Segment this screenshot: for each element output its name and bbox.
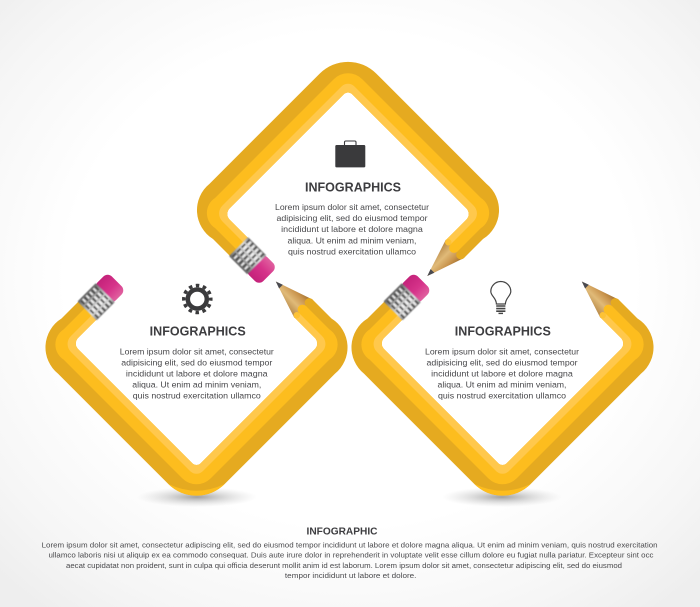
shadow: left pencil: [137, 487, 257, 507]
text block: left panel: [120, 346, 274, 401]
text block: footer: aecat cupidatat non proident, sunt in culpa qui officia deserunt mollit anim id est laborum. Lorem ipsum dolor sit amet, consectetur adipiscing elit, sed do eiusmod: [66, 561, 622, 570]
text block: left panel: quis nostrud exercitation ullamco: [133, 391, 261, 401]
heading: left panel: INFOGRAPHICS: [150, 325, 246, 339]
text block: left panel: Lorem ipsum dolor sit amet, consectetur: [120, 346, 274, 356]
icon: gear: [184, 286, 211, 312]
text block: top panel: Lorem ipsum dolor sit amet, consectetur: [275, 202, 429, 212]
text block: left panel: incididunt ut labore et dolore magna: [126, 368, 268, 378]
text block: footer: Lorem ipsum dolor sit amet, consectetur adipiscing elit, sed do eiusmod tempor incididunt ut labore et dolore magna aliqua. Ut enim ad minim veniam, quis nostrud exercitation: [42, 540, 658, 550]
text block: right panel: incididunt ut labore et dolore magna: [431, 368, 573, 378]
text block: right panel: quis nostrud exercitation ullamco: [438, 391, 566, 401]
panel: top pencil frame: [197, 62, 499, 286]
heading: footer title: INFOGRAPHIC: [306, 526, 378, 538]
shadow: right pencil: [442, 487, 562, 507]
text block: top panel: incididunt ut labore et dolore magna: [281, 224, 423, 234]
heading: top panel: INFOGRAPHICS: [305, 181, 401, 195]
text block: right panel: aliqua. Ut enim ad minim veniam,: [438, 380, 566, 390]
icon: briefcase: [335, 141, 365, 167]
text block: right panel: adipisicing elit, sed do eiusmod tempor: [426, 357, 578, 367]
text block: top panel: quis nostrud exercitation ullamco: [288, 246, 416, 256]
icon: light bulb: [491, 282, 511, 313]
text block: right panel: [425, 346, 579, 401]
text block: top panel: aliqua. Ut enim ad minim veniam,: [288, 235, 416, 245]
text block: left panel: aliqua. Ut enim ad minim veniam,: [132, 380, 261, 390]
panel: left pencil frame: [45, 272, 348, 496]
heading: right panel: INFOGRAPHICS: [455, 325, 551, 339]
text block: footer: tempor incididunt ut labore et dolore.: [285, 571, 416, 580]
panel: right pencil frame: [351, 272, 654, 496]
text block: footer: ullamco laboris nisi ut aliquip ex ea commodo consequat. Duis aute irure dolor in reprehenderit in voluptate velit esse cillum dolore eu fugiat nulla pariatur. Excepteur sint occ: [48, 551, 654, 560]
text block: left panel: adipisicing elit, sed do eiusmod tempor: [121, 357, 272, 367]
text block: footer: [42, 540, 658, 580]
text block: right panel: Lorem ipsum dolor sit amet, consectetur: [425, 346, 579, 356]
text block: top panel: adipisicing elit, sed do eiusmod tempor: [276, 213, 428, 223]
text block: top panel: [275, 202, 429, 256]
